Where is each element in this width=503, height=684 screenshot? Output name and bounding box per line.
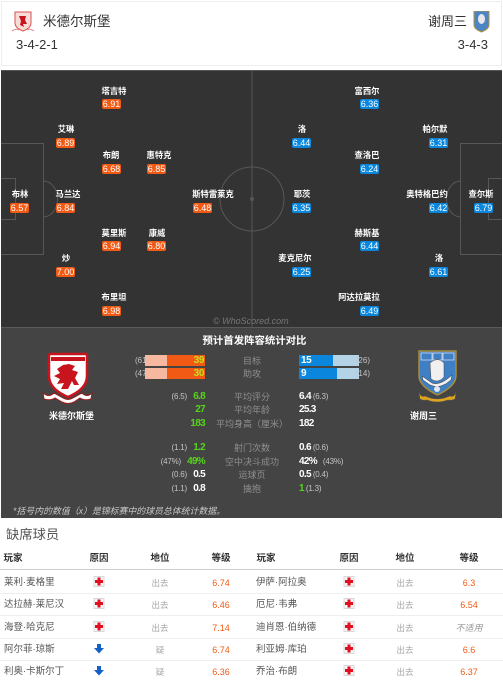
bar: assists away: 9: [301, 368, 306, 379]
stat row: aerial duels: [161, 456, 343, 467]
away player: 洛: [292, 124, 311, 148]
text: 6.31: [430, 138, 447, 148]
away player: 耶茨: [292, 188, 311, 213]
stat row: shots: [172, 442, 328, 453]
row 4: 出去: [396, 645, 414, 655]
away player: 麦克尼尔: [278, 252, 312, 277]
text: 洛: [298, 124, 306, 134]
row 2: 达拉赫·莱尼汉: [4, 599, 64, 610]
text: 6.89: [57, 138, 74, 148]
row 2: 厄尼·韦弗: [256, 599, 297, 610]
row 4: 阿尔菲·琼斯: [4, 644, 55, 655]
home player: 布里坦: [102, 292, 126, 316]
text: 6.35: [293, 203, 310, 213]
row 4: 利亚姆·库珀: [256, 644, 307, 655]
row 1: [4, 576, 475, 588]
stat row: dribbles: 运球页: [238, 470, 266, 480]
row 4: 6.74: [212, 645, 230, 655]
team label: Sheffield Wednesday: 谢周三: [410, 411, 437, 421]
home player: 惠特克: [146, 150, 172, 174]
stat row: average age: [195, 404, 316, 415]
stat row: dribbles: 0.5(0.4): [299, 469, 328, 480]
label: goals: 目标: [243, 356, 261, 366]
home player: 布朗: [102, 150, 121, 174]
text: 6.42: [430, 203, 447, 213]
text: 炒: [62, 252, 70, 262]
text: 查洛巴: [355, 150, 379, 160]
icon: Middlesbrough crest: [42, 352, 93, 404]
stat row: average age: 25.3: [299, 404, 316, 415]
pitch markings: [1, 71, 502, 327]
stat row: tackles: [172, 483, 322, 494]
table headers: 等级: [459, 553, 479, 564]
stat row: average rating: [172, 391, 328, 402]
stat row: shots: 0.6(0.6): [299, 442, 328, 453]
bar: goals home: 39: [194, 355, 204, 366]
bar: goals home: [135, 355, 205, 366]
team label: Middlesbrough: 米德尔斯堡: [49, 411, 94, 421]
row 4: 6.6: [463, 645, 475, 655]
home player: 莫里斯: [102, 228, 126, 251]
row 2: 6.54: [460, 600, 478, 610]
bar: goals home: (61): [135, 356, 149, 365]
stat row: average age: 平均年龄: [234, 405, 270, 415]
formation: home: 3-4-2-1: [16, 37, 58, 52]
stat row: tackles: 1(1.3): [299, 483, 321, 494]
stat row: average height: 平均身高（厘米）: [216, 419, 288, 429]
stat row: aerial duels: (47%): [161, 457, 181, 466]
away player: 查洛巴: [354, 150, 380, 174]
bar: goals away: (26): [356, 356, 370, 365]
table headers: 玩家: [256, 553, 276, 564]
text: 康威: [149, 228, 165, 238]
away player: 洛 (2): [429, 252, 448, 277]
home player: 康威: [147, 228, 166, 251]
row 3: [0, 623, 503, 635]
row 1: 6.3: [463, 578, 475, 588]
row 3: 海登·哈克尼: [4, 622, 55, 633]
row 5: 利奥·卡斯尔丁: [4, 666, 64, 677]
text: 奥特格巴约: [406, 188, 448, 198]
footnote: *括号内的数值（x）是锦标赛中的球员总体统计数据。: [13, 506, 225, 516]
bar: assists home: [135, 368, 205, 379]
text: 6.36: [361, 99, 378, 109]
stat row: shots: 射门次数: [234, 443, 270, 453]
away player: 富西尔: [355, 86, 380, 109]
row 5: 6.37: [460, 667, 478, 677]
team name: Sheffield Wednesday: 谢周三: [428, 14, 467, 29]
bar: assists away: (14): [356, 369, 370, 378]
bar: goals away: [299, 355, 370, 366]
text: 6.25: [293, 267, 310, 277]
away player: 帕尔默: [422, 124, 448, 148]
text: 6.98: [103, 306, 120, 316]
heading: missing players: 缺席球员: [6, 527, 59, 542]
row 2: 出去: [396, 600, 414, 610]
text: 6.80: [148, 241, 165, 251]
text: 斯特雷莱克: [192, 188, 234, 198]
row 3: 不适用: [455, 623, 483, 633]
row 5: 6.36: [212, 667, 230, 677]
home player: 斯特雷莱克: [192, 188, 234, 213]
stat row: average rating: (6.5): [172, 392, 187, 401]
icon: Middlesbrough small crest: [12, 12, 34, 32]
row 3: 迪肖恩·伯纳德: [256, 622, 316, 633]
watermark: © WhoScored.com: [213, 316, 289, 326]
bar: goals away: 15: [301, 355, 311, 366]
text: 帕尔默: [423, 124, 447, 134]
text: 赫斯基: [355, 228, 379, 238]
text: 阿达拉莫拉: [338, 292, 380, 302]
row 3: 7.14: [212, 623, 230, 633]
row 5: 疑: [156, 667, 164, 677]
table headers: 地位: [150, 553, 170, 564]
stat row: average height: [190, 418, 314, 429]
home player: 艾琳: [56, 124, 75, 148]
row 4: [0, 645, 503, 657]
table headers: 原因: [89, 553, 109, 564]
stat row: shots: 1.2: [193, 442, 205, 453]
text: 布朗: [103, 150, 119, 160]
row 2: 6.46: [212, 600, 230, 610]
stat row: average height: 183: [190, 418, 205, 429]
text: 6.48: [194, 203, 211, 213]
away player: 查尔斯: [468, 188, 494, 213]
stat row: dribbles: (0.6): [172, 470, 187, 479]
stat row: average rating: 6.4(6.3): [299, 391, 328, 402]
text: 富西尔: [355, 86, 379, 96]
text: 塔吉特: [102, 86, 126, 96]
row 5: [0, 667, 503, 679]
table: missing players: [0, 552, 503, 677]
stat row: average age: 27: [195, 404, 205, 415]
text: 耶茨: [294, 188, 310, 198]
stat row: tackles: 0.8: [193, 483, 205, 494]
text: 6.61: [430, 267, 447, 277]
text: 艾琳: [58, 124, 74, 134]
home player: 马兰达: [56, 188, 80, 213]
text: 6.57: [11, 203, 28, 213]
stat row: average rating: 平均评分: [234, 392, 270, 402]
stat row: aerial duels: 49%: [187, 456, 205, 467]
stats title: 预计首发阵容统计对比: [203, 336, 306, 347]
away player: 赫斯基: [354, 228, 380, 251]
text: 马兰达: [56, 188, 80, 198]
text: 6.49: [361, 306, 378, 316]
bar: assists home: (47): [135, 369, 149, 378]
row 1: 6.74: [212, 578, 230, 588]
bar: assists away: [299, 368, 370, 379]
stat row: dribbles: 0.5: [193, 469, 205, 480]
label: assists: 助攻: [243, 369, 261, 379]
text: 7.00: [57, 267, 74, 277]
away player: 阿达拉莫拉: [338, 292, 380, 316]
text: 莫里斯: [102, 228, 126, 238]
stat row: average height: 182: [299, 418, 314, 429]
panel: pitch: [1, 70, 502, 328]
text: 麦克尼尔: [278, 252, 312, 262]
table headers: 等级: [211, 553, 231, 564]
text: 6.24: [361, 164, 378, 174]
row 4: 疑: [156, 645, 164, 655]
bar: assists home: 30: [194, 368, 204, 379]
text: 6.91: [103, 99, 120, 109]
text: 惠特克: [147, 150, 171, 160]
row 2: 出去: [151, 600, 169, 610]
home player: 炒: [56, 252, 75, 277]
team name: Middlesbrough: 米德尔斯堡: [43, 14, 110, 29]
table headers: 地位: [395, 553, 415, 564]
panel: stats comparison: [1, 327, 502, 518]
text: 6.94: [103, 241, 120, 251]
table headers: 玩家: [3, 553, 23, 564]
row 1: 伊萨·阿拉奥: [256, 577, 307, 588]
icon: Sheffield Wednesday small crest: [474, 11, 490, 32]
text: 6.44: [293, 138, 310, 148]
away player: 奥特格巴约: [406, 188, 448, 213]
row 1: 出去: [396, 578, 414, 588]
header card: [1, 1, 502, 66]
stat row: dribbles: [172, 469, 328, 480]
text: 6.68: [103, 164, 120, 174]
home player: 布林: [10, 188, 29, 213]
text: 6.84: [57, 203, 74, 213]
formation: away: 3-4-3: [458, 37, 488, 52]
row 1: 莱利·麦格里: [4, 577, 55, 588]
row 1: 出去: [151, 578, 169, 588]
text: 6.44: [361, 241, 378, 251]
row 5: 乔治·布朗: [256, 666, 297, 677]
home player: 塔吉特: [102, 86, 126, 109]
text: 布林: [12, 188, 28, 198]
text: 布里坦: [102, 292, 126, 302]
row 3: 出去: [396, 623, 414, 633]
table headers: 原因: [339, 553, 359, 564]
text: 6.85: [148, 164, 165, 174]
row 3: 出去: [151, 623, 169, 633]
icon: Sheffield Wednesday crest: [418, 350, 457, 402]
text: 查尔斯: [469, 188, 493, 198]
stat row: average rating: 6.8: [193, 391, 205, 402]
stat row: shots: (1.1): [172, 443, 187, 452]
stat row: tackles: (1.1): [172, 484, 187, 493]
text: 6.79: [475, 203, 492, 213]
row 5: 出去: [396, 667, 414, 677]
stat row: aerial duels: 42% (43%): [299, 456, 343, 467]
stat row: tackles: 擒抱: [243, 484, 261, 494]
stat row: aerial duels: 空中决斗成功: [225, 457, 279, 467]
row 2: [0, 600, 503, 612]
text: 洛: [435, 252, 443, 262]
